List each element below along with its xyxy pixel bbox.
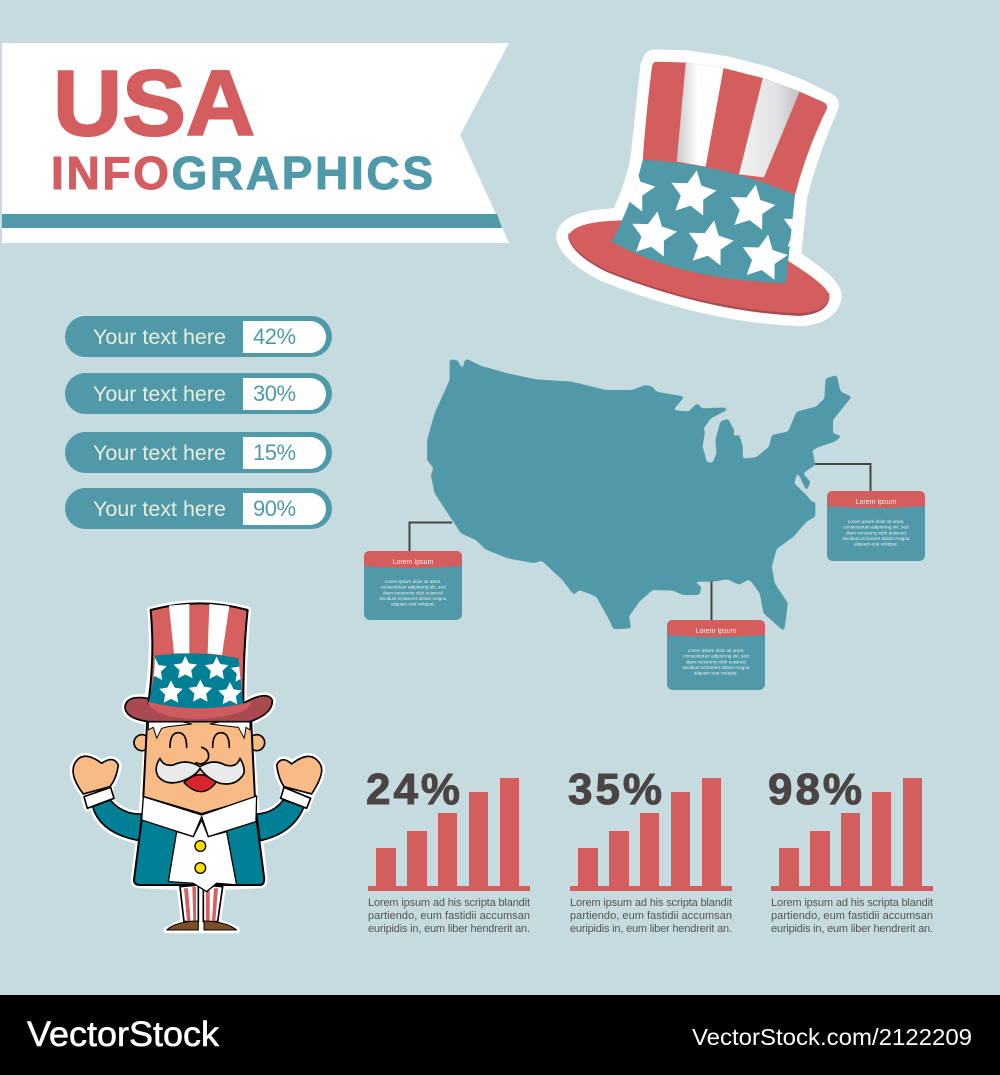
footer url text: VectorStock.com/2122209 [692,1024,972,1050]
info box: west: aliquam erat volutpat. [391,602,435,607]
info box: east: tincidunt ut laoreet dolore magna [843,536,910,541]
left leg [180,885,198,922]
buttons [195,841,206,873]
info box: south: Lorem ipsum dolor sit amet, [688,648,744,653]
title banner [2,43,509,243]
ears [134,735,265,751]
stat pill 2: Your text here [93,382,226,406]
info box: south: Lorem Ipsum [696,628,737,635]
stat pill 3 [65,432,332,473]
caption 1 [368,897,530,935]
caption 2 [570,897,732,935]
info box: west: diam nonummy nibh euismod [383,590,443,595]
stat pill 2: 30% [253,381,296,406]
title: INFOGRAPHICS: INFOGRAPHICS [51,147,433,199]
stat pill 2 [65,373,332,414]
bar chart 3 [768,765,933,935]
caption 2: partiendo, eum fastidii accumsan [570,910,732,922]
mouth [184,775,216,792]
right cuff [281,787,311,808]
caption 1: euripidis in, eum liber hendrerit an. [368,923,530,935]
hat crown [148,603,248,703]
caption 3: partiendo, eum fastidii accumsan [771,910,933,922]
stat pill 4: Your text here [93,497,226,521]
jacket [134,820,264,885]
bar chart 3: 98% [768,765,862,814]
icon: top hat [568,60,832,316]
left arm [93,800,142,841]
hat brim front [147,702,252,719]
stat pill 4: 90% [253,496,296,521]
hair [148,710,250,738]
caption 2: euripidis in, eum liber hendrerit an. [570,923,732,935]
watermark footer bar [0,995,1000,1075]
info box: east: Lorem Ipsum [856,499,897,506]
info box: south: tincidunt ut laoreet dolore magna [683,665,750,670]
right arm [257,800,304,841]
caption 1: partiendo, eum fastidii accumsan [368,910,530,922]
caption 1: Lorem ipsum ad his scripta blandit [368,897,530,909]
right leg [203,885,223,922]
bar chart 2 [568,765,732,935]
info box: west: Lorem ipsum dolor sit amet, [385,579,441,584]
caption 3 [771,897,933,935]
info box: east [827,491,925,561]
stat pill 3: Your text here [93,441,226,465]
left cuff [84,787,114,808]
hat brim [125,696,272,722]
nose [196,747,209,764]
hat band [148,653,243,709]
right mitt [277,756,322,794]
caption 3: euripidis in, eum liber hendrerit an. [771,923,933,935]
bar chart 2: 35% [568,765,662,814]
info box: west [364,551,462,620]
face [143,717,255,814]
stat pill 1: 42% [253,324,296,349]
bar chart 1: 24% [366,765,460,814]
info box: south [667,620,765,690]
info box: east: diam nonummy nibh euismod [846,530,906,535]
info box: east: consectetuer adipiscing elit, sed [843,525,909,530]
info box: west: tincidunt ut laoreet dolore magna [380,596,447,601]
eyes [170,733,229,764]
collar [142,796,257,837]
info box: west: consectetuer adipiscing elit, sed [380,585,446,590]
info box: south: diam nonummy nibh euismod [686,659,746,664]
title: USA: USA [53,51,255,155]
caption 3: Lorem ipsum ad his scripta blandit [771,897,933,909]
connector lines [410,464,870,621]
footer logo text: VectorStock [27,1015,220,1054]
shoes [167,921,237,930]
left mitt [73,756,118,794]
character: Uncle Sam [73,603,322,930]
info box: east: Lorem ipsum dolor sit amet, [848,519,904,524]
moustache [156,758,244,784]
stat pill 1: Your text here [93,325,226,349]
map of the USA [427,358,852,632]
info box: east: aliquam erat volutpat. [854,542,898,547]
info box: west: Lorem Ipsum [393,559,434,566]
stat pill 4 [65,488,332,529]
shirt [168,820,237,892]
info box: south: aliquam erat volutpat. [694,671,738,676]
bar chart 1 [366,765,530,935]
stat pill 3: 15% [253,440,296,465]
caption 2: Lorem ipsum ad his scripta blandit [570,897,732,909]
info box: south: consectetuer adipiscing elit, sed [683,654,749,659]
stat pill 1 [65,316,332,357]
